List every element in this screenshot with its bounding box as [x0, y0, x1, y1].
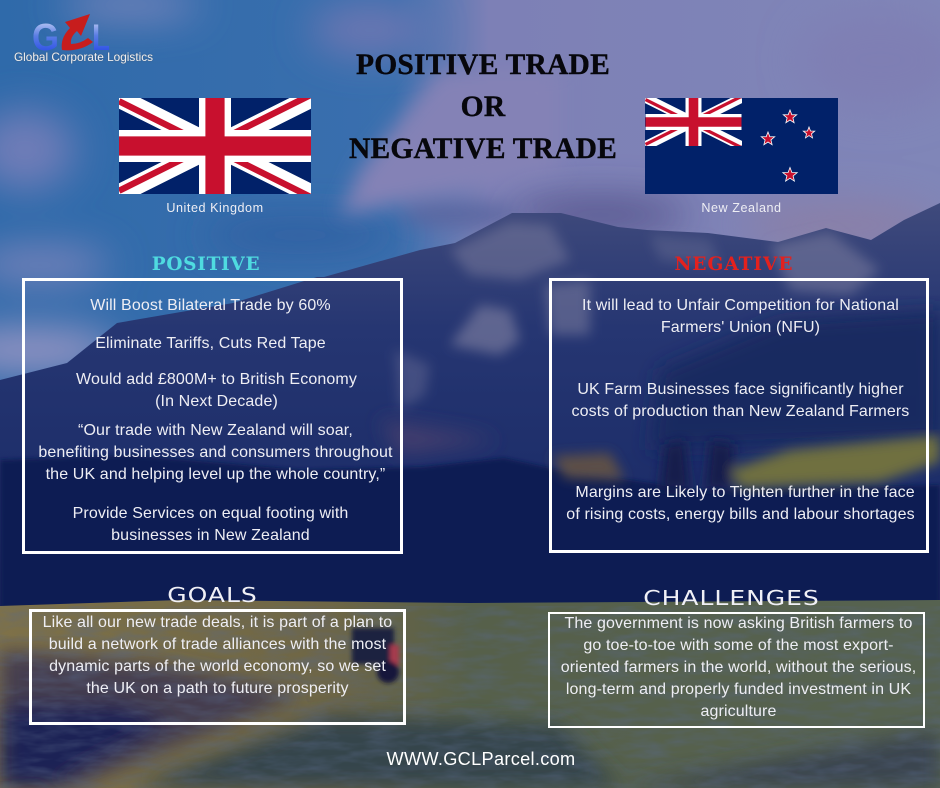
challenges text: oriented farmers in the world, without the serious, [561, 659, 916, 676]
panel: positive [22, 278, 403, 554]
dark foothills [0, 455, 940, 620]
panel: negative [549, 278, 929, 553]
challenges text [561, 615, 916, 720]
title: OR [461, 91, 505, 123]
title: POSITIVE TRADE [356, 49, 610, 81]
logo: Global Corporate Logistics [14, 14, 153, 64]
heading: challenges: CHALLENGES [643, 586, 820, 610]
tractor [352, 628, 399, 683]
label: New Zealand: New Zealand [701, 201, 782, 215]
goals text: the UK on a path to future prosperity [86, 680, 349, 697]
point: margins: Margins are Likely to Tighten further in the face [575, 484, 915, 501]
goals text [43, 614, 392, 697]
heading: negative: NEGATIVE [674, 254, 794, 275]
goals text: dynamic parts of the world economy, so we set [49, 658, 386, 675]
panel: challenges [548, 612, 925, 728]
flag: New Zealand [645, 98, 838, 194]
label: United Kingdom: United Kingdom [166, 201, 264, 215]
field [0, 600, 940, 788]
quote: “Our trade with New Zealand will soar, [78, 422, 353, 439]
point: unfair competition [582, 297, 899, 336]
goals text: build a network of trade alliances with the most [49, 636, 386, 653]
point: economy: (In Next Decade) [155, 393, 278, 410]
heading: positive: POSITIVE [152, 254, 260, 275]
point: unfair competition: It will lead to Unfair Competition for National [582, 297, 899, 314]
point: higher costs [572, 381, 909, 420]
quote: benefiting businesses and consumers throughout [38, 444, 393, 461]
valley fields [552, 435, 940, 490]
point: higher costs: costs of production than New Zealand Farmers [572, 403, 909, 420]
title: NEGATIVE TRADE [349, 133, 617, 165]
quote [38, 422, 393, 483]
challenges text: agriculture [700, 703, 777, 720]
logo tagline: Global Corporate Logistics [14, 50, 153, 64]
mountain rock faces [395, 222, 880, 410]
point: bilateral trade: Will Boost Bilateral Trade by 60% [90, 297, 331, 314]
point: economy: Would add £800M+ to British Economy [76, 371, 357, 388]
point: services [73, 505, 348, 544]
challenges text: long-term and properly funded investment in UK [566, 681, 911, 698]
point: economy [76, 371, 357, 410]
flag: United Kingdom [119, 98, 311, 194]
heading: goals: GOALS [167, 583, 258, 607]
point: margins [566, 484, 915, 523]
point: services: businesses in New Zealand [111, 527, 310, 544]
title [349, 49, 617, 165]
point: tariffs: Eliminate Tariffs, Cuts Red Tape [95, 335, 326, 352]
point: margins: of rising costs, energy bills and labour shortages [566, 506, 915, 523]
quote: the UK and helping level up the whole country,” [46, 466, 385, 483]
point: services: Provide Services on equal footing with [73, 505, 348, 522]
goals text: Like all our new trade deals, it is part of a plan to [43, 614, 392, 631]
point: higher costs: UK Farm Businesses face significantly higher [577, 381, 904, 398]
website footer: WWW.GCLParcel.com [386, 749, 576, 769]
challenges text: The government is now asking British farmers to [564, 615, 912, 632]
point: unfair competition: Farmers' Union (NFU) [661, 319, 820, 336]
logo mark [32, 14, 110, 54]
mountain silhouette [0, 203, 940, 620]
challenges text: go toe-to-toe with some of the most export- [583, 637, 894, 654]
panel: goals [29, 609, 406, 725]
